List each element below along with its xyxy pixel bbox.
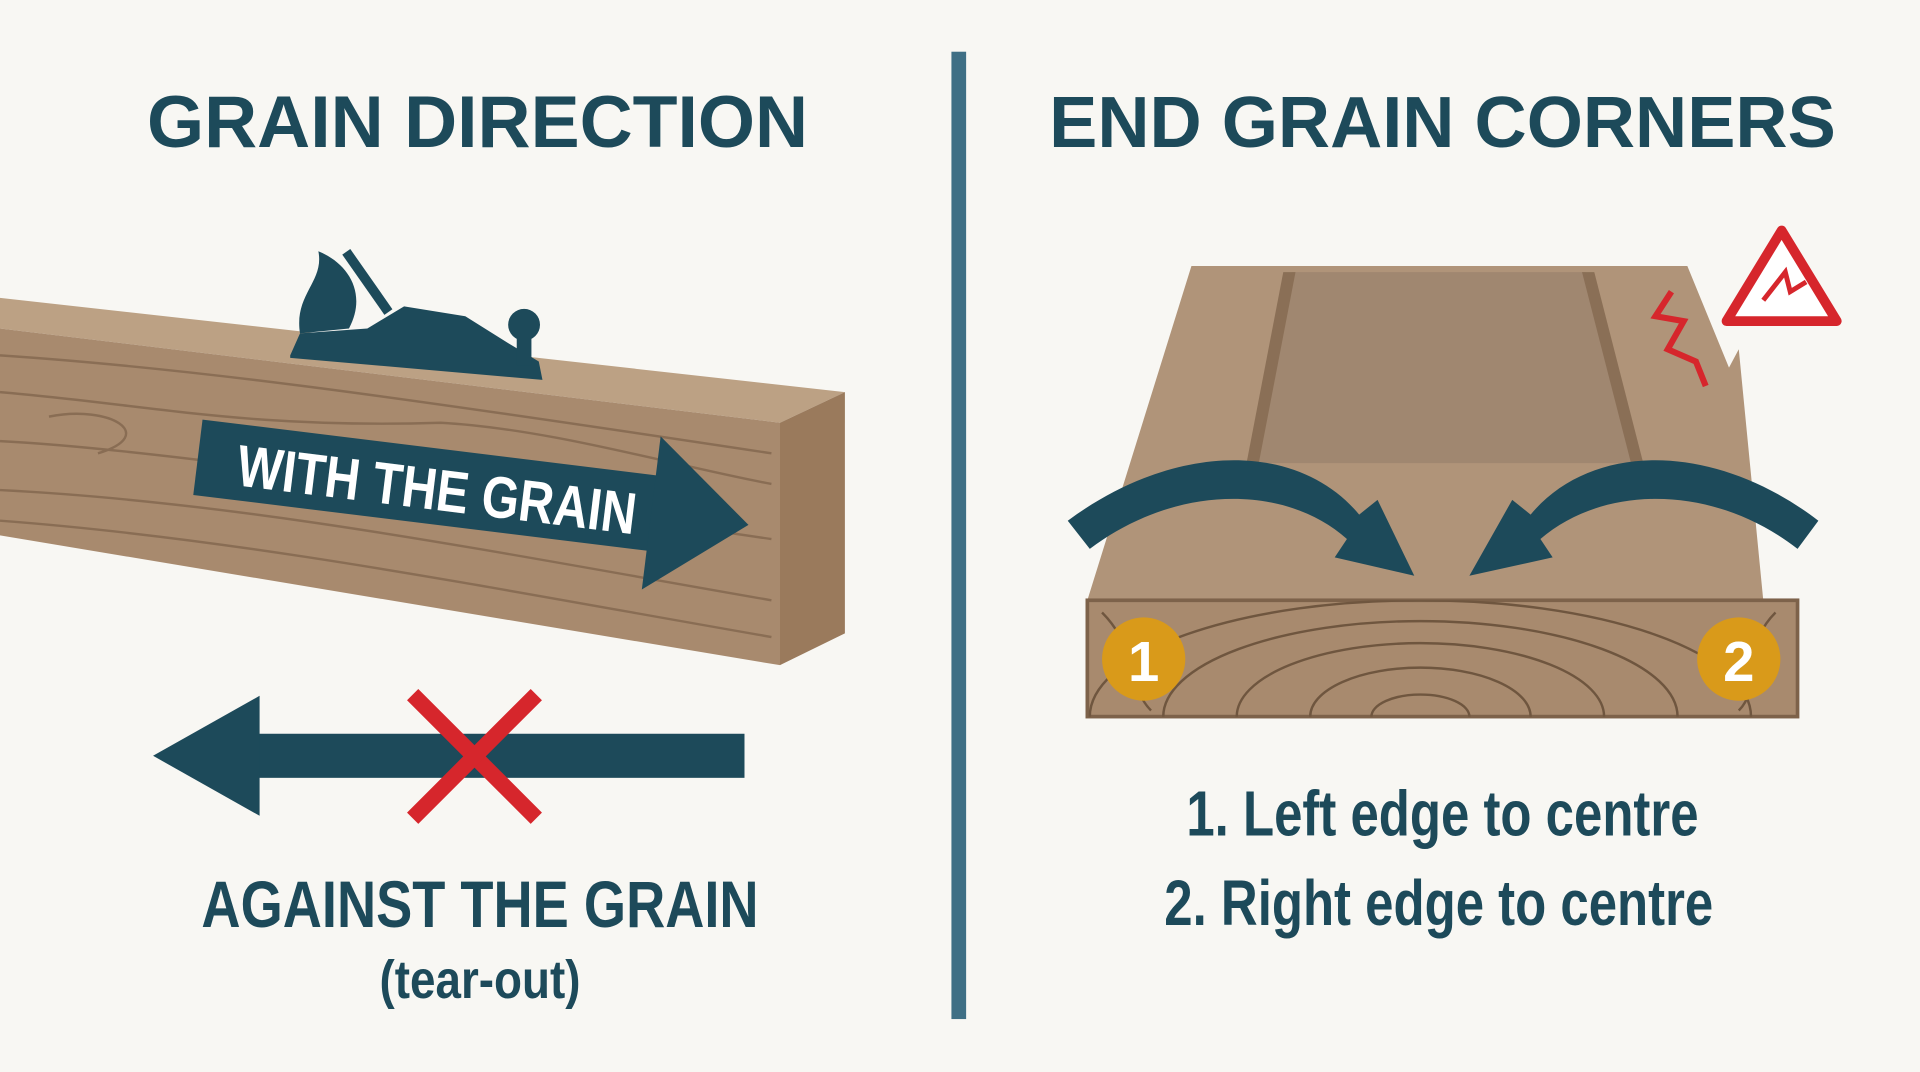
text: against the grain bbox=[201, 867, 759, 1010]
icon: red X bbox=[413, 695, 536, 818]
arrow: against the grain bbox=[153, 696, 744, 816]
panel: end grain board bbox=[1086, 266, 1800, 718]
icon: hand plane bbox=[290, 249, 542, 380]
arrow: right curved bbox=[1469, 460, 1818, 576]
title: end grain corners: END GRAIN CORNERS bbox=[1049, 83, 1836, 163]
text: against the grain: (tear-out) bbox=[380, 950, 580, 1010]
panel: wood board with plane bbox=[0, 249, 845, 665]
badge 2: 2 bbox=[1723, 630, 1754, 693]
arrow: with the grain: WITH THE GRAIN bbox=[234, 433, 640, 547]
badge 2 bbox=[1697, 617, 1780, 701]
text: steps: 1. Left edge to centre bbox=[1186, 779, 1699, 850]
text: against the grain: AGAINST THE GRAIN bbox=[201, 867, 759, 941]
text: steps: 2. Right edge to centre bbox=[1164, 868, 1713, 939]
arrow: with the grain bbox=[189, 381, 758, 601]
text: steps bbox=[1164, 779, 1713, 939]
icon: crack lightning bbox=[1656, 292, 1706, 386]
badge 1: 1 bbox=[1128, 630, 1159, 693]
arrow: left curved bbox=[1068, 460, 1414, 576]
icon: warning triangle bbox=[1727, 230, 1837, 321]
badge 1 bbox=[1102, 617, 1185, 701]
title: grain direction: GRAIN DIRECTION bbox=[147, 80, 808, 163]
